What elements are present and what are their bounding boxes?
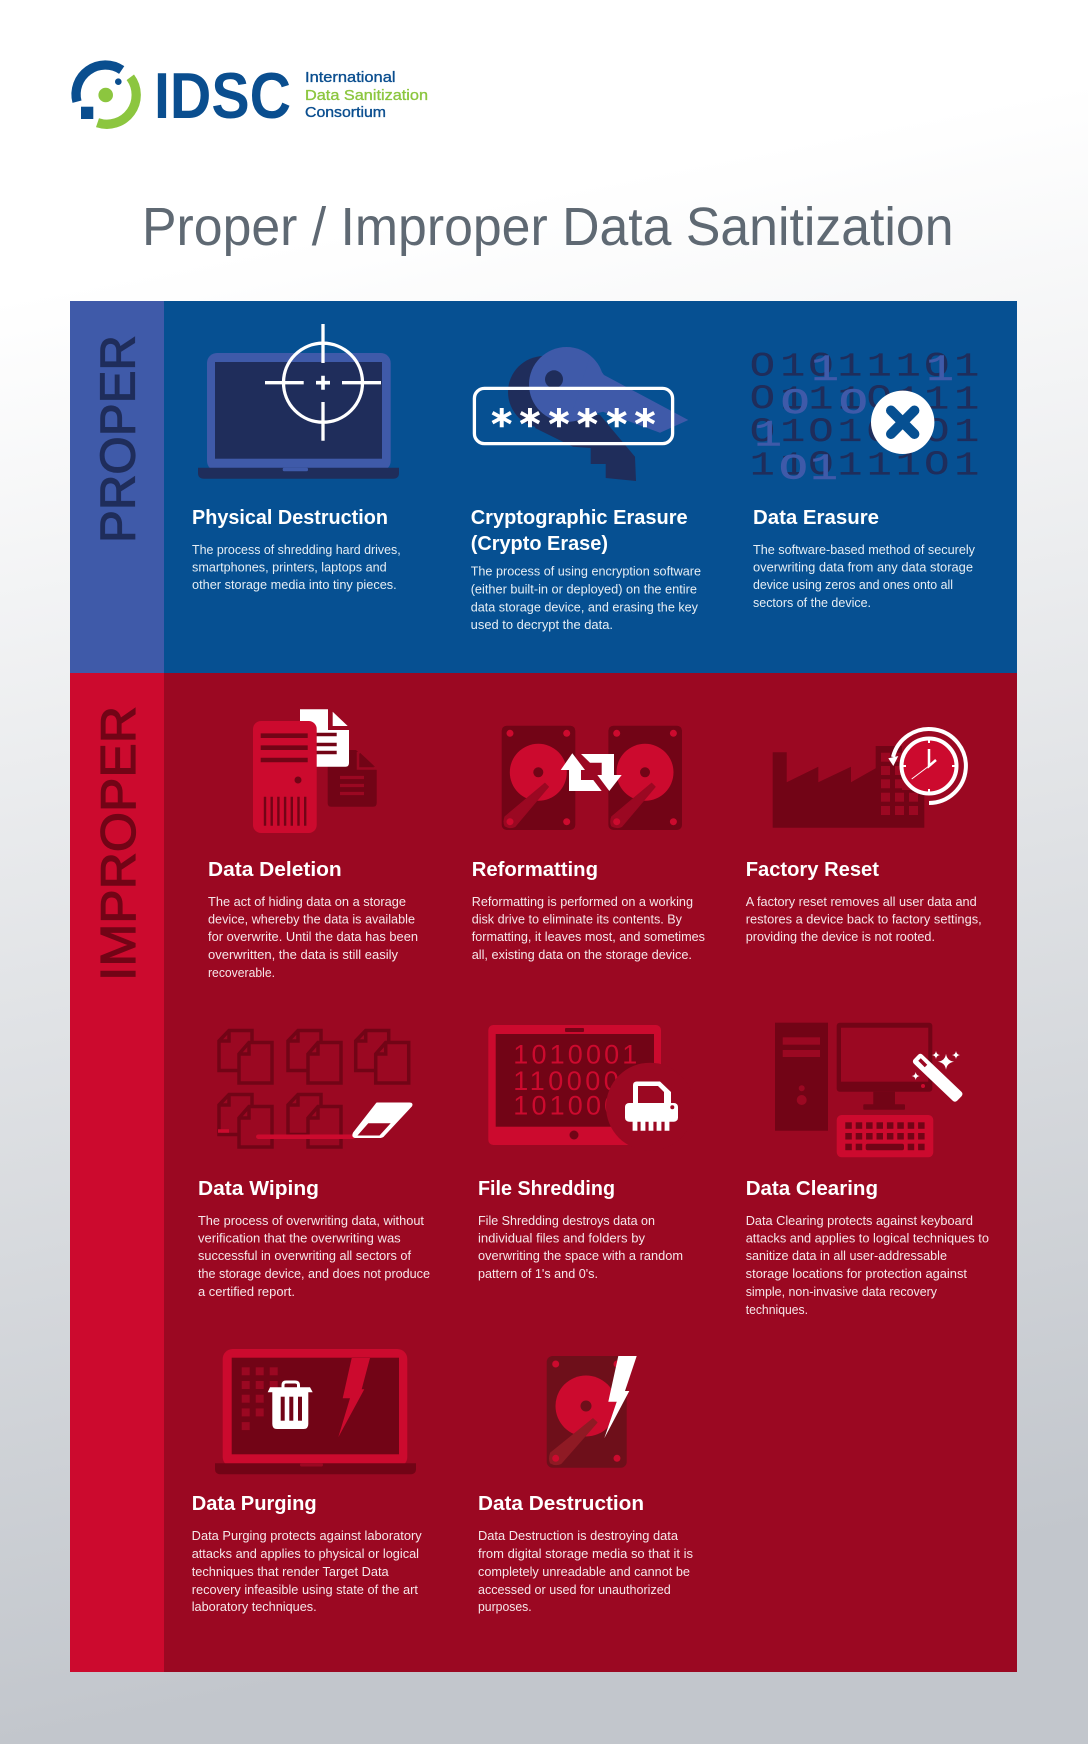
- text: Data Wiping description: [198, 1213, 430, 1299]
- text: Data Wiping description: verification that the overwriting was: [198, 1230, 401, 1246]
- heading: Data Deletion: Data Deletion: [208, 858, 342, 881]
- panel: improper: [70, 673, 1017, 1672]
- icon: binary grid with X: 00: [750, 380, 891, 416]
- text: Data Erasure description: overwriting data from any data storage: [753, 560, 973, 575]
- text: Data Erasure description: sectors of the device.: [753, 595, 871, 610]
- text: Data Erasure description: device using zeros and ones onto all: [753, 577, 953, 592]
- text: Data Purging description: [192, 1528, 422, 1614]
- text: Cryptographic Erasure description: data storage device, and erasing the key: [471, 600, 699, 614]
- icon: monitor with binary and shredder: 1010001: [513, 1039, 637, 1069]
- icon: binary grid with X: 111111: [780, 382, 979, 419]
- text: Factory Reset description: A factory reset removes all user data and: [746, 894, 977, 909]
- text: Reformatting description: formatting, it leaves most, and sometimes: [472, 929, 705, 944]
- text: Data Destruction description: accessed or used for unauthorized: [478, 1582, 671, 1597]
- logo: IDSC: Consortium: [305, 104, 386, 121]
- icon: binary grid with X: 1: [810, 448, 838, 490]
- heading: Factory Reset: Factory Reset: [746, 858, 879, 881]
- text: Data Erasure description: [753, 542, 976, 610]
- logo: IDSC: [76, 59, 428, 132]
- text: Data Clearing description: attacks and applies to logical techniques to: [746, 1230, 989, 1246]
- icon: binary grid with X: 000: [750, 348, 949, 383]
- text: Factory Reset description: [746, 894, 982, 944]
- icon: laptop with crosshair: [198, 324, 399, 479]
- text: Cryptographic Erasure description: [471, 564, 701, 632]
- text: File Shredding description: overwriting the space with a random: [478, 1248, 683, 1263]
- icon: desktop computer with magic wand: [775, 1023, 964, 1157]
- text: Data Destruction description: purposes.: [478, 1599, 532, 1614]
- text: Physical Destruction description: [192, 542, 401, 592]
- title: Proper / Improper Data Sanitization: [142, 197, 954, 257]
- text: Cryptographic Erasure description: (either built-in or deployed) on the entire: [471, 582, 697, 596]
- icon: key and password field: [474, 347, 688, 481]
- icon: hard drive with lightning: [547, 1356, 637, 1468]
- text: Data Wiping description: the storage device, and does not produce: [198, 1266, 430, 1281]
- text: File Shredding description: individual files and folders by: [478, 1230, 646, 1246]
- text: Data Clearing description: techniques.: [746, 1302, 808, 1317]
- text: Factory Reset description: restores a device back to factory settings,: [746, 911, 982, 926]
- icon: monitor with binary and shredder: 1010001: [513, 1090, 637, 1120]
- text: Data Deletion description: for overwrite. Until the data has been: [208, 929, 418, 944]
- icon: two hard drives with swap arrows: [502, 726, 682, 830]
- heading: Cryptographic Erasure: Cryptographic Erasure: [471, 506, 688, 529]
- heading: Cryptographic Erasure: (Crypto Erase): [471, 532, 608, 555]
- text: Data Clearing description: [746, 1213, 989, 1317]
- text: File Shredding description: pattern of 1's and 0's.: [478, 1266, 598, 1281]
- text: Reformatting description: disk drive to eliminate its contents. By: [472, 911, 683, 926]
- icon: binary grid with X: 111111: [750, 448, 979, 485]
- icon: monitor with binary and shredder: [488, 1025, 694, 1151]
- heading: Cryptographic Erasure: [471, 506, 688, 555]
- text: Physical Destruction description: smartphones, printers, laptops and: [192, 560, 387, 575]
- text: Data Destruction description: [478, 1528, 693, 1614]
- panel: proper: [70, 301, 1017, 673]
- text: Data Deletion description: [208, 894, 418, 980]
- text: Data Clearing description: simple, non-invasive data recovery: [746, 1284, 938, 1299]
- text: Data Purging description: techniques that render Target Data: [192, 1564, 390, 1579]
- text: Data Clearing description: sanitize data in all user-addressable: [746, 1248, 947, 1263]
- icon: binary grid with X: 0000: [750, 413, 949, 449]
- heading: Physical Destruction: Physical Destruction: [192, 506, 388, 529]
- text: Data Purging description: recovery infeasible using state of the art: [192, 1582, 418, 1597]
- icon: binary grid with X: 1111: [780, 414, 979, 452]
- label: PROPER: PROPER: [91, 335, 145, 543]
- icon: factory with reset clock: [773, 729, 966, 828]
- text: Factory Reset description: providing the device is not rooted.: [746, 929, 935, 944]
- text: Data Destruction description: completely unreadable and cannot be: [478, 1564, 690, 1579]
- text: Cryptographic Erasure description: The process of using encryption software: [471, 564, 701, 579]
- icon: binary grid with X: 1: [754, 415, 782, 457]
- text: Reformatting description: [472, 894, 705, 962]
- text: Data Clearing description: storage locations for protection against: [746, 1266, 967, 1281]
- text: Data Purging description: laboratory techniques.: [192, 1599, 317, 1614]
- icon: binary grid with X: 0: [780, 448, 807, 486]
- heading: Data Purging: Data Purging: [192, 1492, 317, 1515]
- text: Data Deletion description: device, whereby the data is available: [208, 911, 415, 926]
- text: Data Destruction description: from digital storage media so that it is: [478, 1546, 693, 1561]
- heading: File Shredding: File Shredding: [478, 1177, 615, 1200]
- text: Data Erasure description: The software-based method of securely: [753, 542, 976, 557]
- text: Data Wiping description: a certified report.: [198, 1284, 295, 1299]
- text: Data Deletion description: overwritten, the data is still easily: [208, 947, 399, 962]
- text: Reformatting description: all, existing data on the storage device.: [472, 947, 692, 962]
- icon: server tower and documents: [253, 709, 377, 833]
- password stars: ******: [491, 402, 656, 448]
- text: Physical Destruction description: other storage media into tiny pieces.: [192, 577, 397, 592]
- logo: IDSC: Data Sanitization: [305, 87, 428, 104]
- icon: binary grid with X: 00: [781, 382, 867, 420]
- text: Physical Destruction description: The process of shredding hard drives,: [192, 542, 401, 557]
- icon: binary grid with X: 11: [811, 349, 954, 391]
- text: Reformatting description: Reformatting is performed on a working: [472, 894, 693, 909]
- text: Data Deletion description: recoverable.: [208, 965, 275, 980]
- heading: Reformatting: Reformatting: [472, 858, 598, 881]
- heading: Data Erasure: Data Erasure: [753, 506, 879, 529]
- label: IMPROPER: IMPROPER: [92, 706, 146, 981]
- text: Data Purging description: Data Purging protects against laboratory: [192, 1528, 422, 1543]
- text: File Shredding description: File Shredding destroys data on: [478, 1213, 655, 1228]
- heading: Data Wiping: Data Wiping: [198, 1177, 319, 1200]
- heading: Data Clearing: Data Clearing: [746, 1177, 878, 1200]
- text: Data Purging description: attacks and applies to physical or logical: [192, 1546, 419, 1561]
- icon: binary grid with X: 00: [809, 446, 949, 482]
- icon: binary grid with X: [750, 348, 979, 490]
- icon: binary grid with X: 11111: [780, 349, 979, 386]
- text: Data Clearing description: Data Clearing protects against keyboard: [746, 1213, 973, 1228]
- text: Cryptographic Erasure description: used to decrypt the data.: [471, 617, 613, 632]
- icon: laptop with trash bin and lightning: [215, 1349, 416, 1474]
- logo: IDSC: International: [305, 69, 396, 86]
- logo: IDSC: IDSC: [154, 59, 291, 132]
- text: Data Deletion description: The act of hiding data on a storage: [208, 894, 406, 909]
- text: File Shredding description: [478, 1213, 683, 1281]
- text: Data Wiping description: The process of overwriting data, without: [198, 1213, 424, 1228]
- text: Data Destruction description: Data Destruction is destroying data: [478, 1528, 679, 1543]
- icon: documents and eraser: [218, 1030, 412, 1147]
- text: Data Wiping description: successful in overwriting all sectors of: [198, 1248, 411, 1263]
- heading: Data Destruction: Data Destruction: [478, 1492, 644, 1515]
- icon: monitor with binary and shredder: 1100001: [513, 1066, 637, 1096]
